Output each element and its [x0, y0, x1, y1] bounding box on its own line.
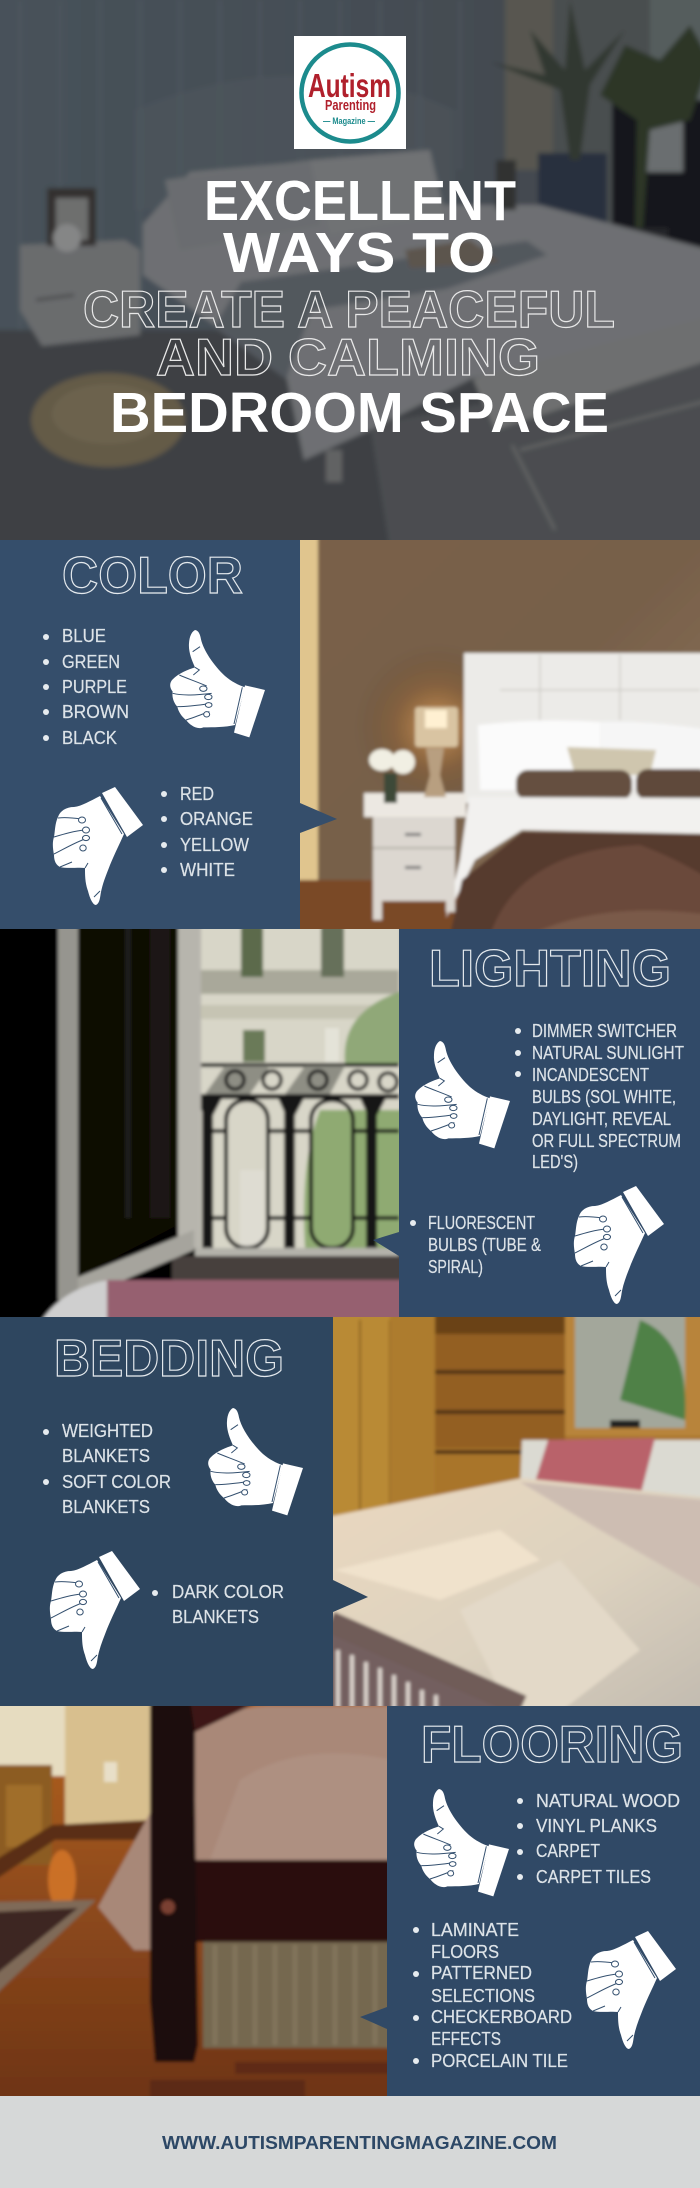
list: good lighting: LED'S): [532, 1152, 578, 1172]
list: bad colors: ORANGE: [180, 809, 253, 829]
icon: thumbs down: [574, 1186, 664, 1304]
list: bad lighting: SPIRAL): [428, 1257, 483, 1277]
logo: Autism Parenting Magazine: Autism: [308, 67, 391, 104]
heading: lighting: LIGHTING: [429, 940, 671, 998]
hero background photo: darkened bedroom: [0, 0, 700, 550]
list: bad lighting: FLUORESCENT: [428, 1213, 535, 1233]
footer: [0, 2096, 700, 2188]
list: bad colors: YELLOW: [180, 835, 249, 855]
list: good lighting: DAYLIGHT, REVEAL: [532, 1109, 671, 1129]
list: bad colors: [161, 784, 253, 880]
logo: Autism Parenting Magazine: [294, 36, 406, 149]
list: bad lighting: [410, 1213, 541, 1277]
list: good lighting: [515, 1021, 684, 1172]
list: bad flooring: SELECTIONS: [431, 1986, 535, 2006]
icon: thumbs down: [586, 1931, 676, 2049]
list: bad flooring: PORCELAIN TILE: [431, 2051, 568, 2071]
panel: bedding: [0, 1317, 368, 1706]
list: good bedding: WEIGHTED: [62, 1421, 153, 1441]
footer url: WWW.AUTISMPARENTINGMAGAZINE.COM: [162, 2133, 557, 2153]
list: good flooring: [517, 1791, 680, 1887]
photo: four-poster bed on wood floor: [0, 1700, 392, 2101]
title: WAYS TO: [223, 221, 495, 285]
list: good bedding: BLANKETS: [62, 1446, 150, 1466]
photo: bedroom with brown wall: [295, 535, 700, 935]
list: good colors: BROWN: [62, 702, 129, 722]
list: bad flooring: CHECKERBOARD: [431, 2007, 572, 2027]
list: good colors: BLACK: [62, 728, 117, 748]
title: EXCELLENT: [204, 169, 516, 233]
list: good flooring: CARPET TILES: [536, 1867, 651, 1887]
list: good colors: GREEN: [62, 652, 120, 672]
logo: Autism Parenting Magazine: Parenting: [325, 97, 376, 114]
list: bad bedding: BLANKETS: [172, 1607, 259, 1627]
list: bad colors: WHITE: [180, 860, 235, 880]
list: bad flooring: EFFECTS: [431, 2029, 501, 2049]
panel: lighting: [373, 929, 700, 1317]
icon: thumbs down: [50, 1551, 140, 1669]
list: bad bedding: DARK COLOR: [172, 1582, 284, 1602]
icon: thumbs up: [414, 1789, 509, 1896]
list: good lighting: INCANDESCENT: [532, 1065, 649, 1085]
list: good bedding: SOFT COLOR: [62, 1472, 171, 1492]
list: bad lighting: BULBS (TUBE &: [428, 1235, 541, 1255]
list: good colors: BLUE: [62, 626, 106, 646]
list: bad colors: RED: [180, 784, 214, 804]
list: good colors: [43, 626, 129, 748]
heading: bedding: BEDDING: [54, 1330, 284, 1388]
list: good colors: PURPLE: [62, 677, 127, 697]
list: bad flooring: [413, 1920, 572, 2071]
photo: open window with balcony: [0, 923, 405, 1323]
list: bad flooring: FLOORS: [431, 1942, 499, 1962]
list: good bedding: [43, 1421, 171, 1517]
panel: flooring: [360, 1706, 700, 2096]
title: BEDROOM SPACE: [110, 381, 609, 445]
icon: thumbs up: [415, 1041, 510, 1148]
logo: Autism Parenting Magazine: — Magazine —: [323, 116, 375, 126]
list: good flooring: CARPET: [536, 1841, 600, 1861]
list: good flooring: VINYL PLANKS: [536, 1816, 657, 1836]
list: bad flooring: LAMINATE: [431, 1920, 519, 1940]
list: bad flooring: PATTERNED: [431, 1963, 532, 1983]
list: bad bedding: [152, 1582, 284, 1627]
title: AND CALMING: [156, 329, 540, 387]
heading: color: COLOR: [62, 547, 243, 605]
title: CREATE A PEACEFUL: [83, 281, 615, 339]
heading: flooring: FLOORING: [421, 1716, 683, 1774]
list: good flooring: NATURAL WOOD: [536, 1791, 680, 1811]
icon: thumbs up: [170, 630, 265, 737]
photo: log cabin bedroom: [328, 1312, 700, 1712]
icon: thumbs down: [53, 787, 143, 905]
icon: thumbs up: [208, 1408, 303, 1515]
title: [83, 169, 615, 445]
list: good bedding: BLANKETS: [62, 1497, 150, 1517]
panel: color: [0, 540, 337, 929]
